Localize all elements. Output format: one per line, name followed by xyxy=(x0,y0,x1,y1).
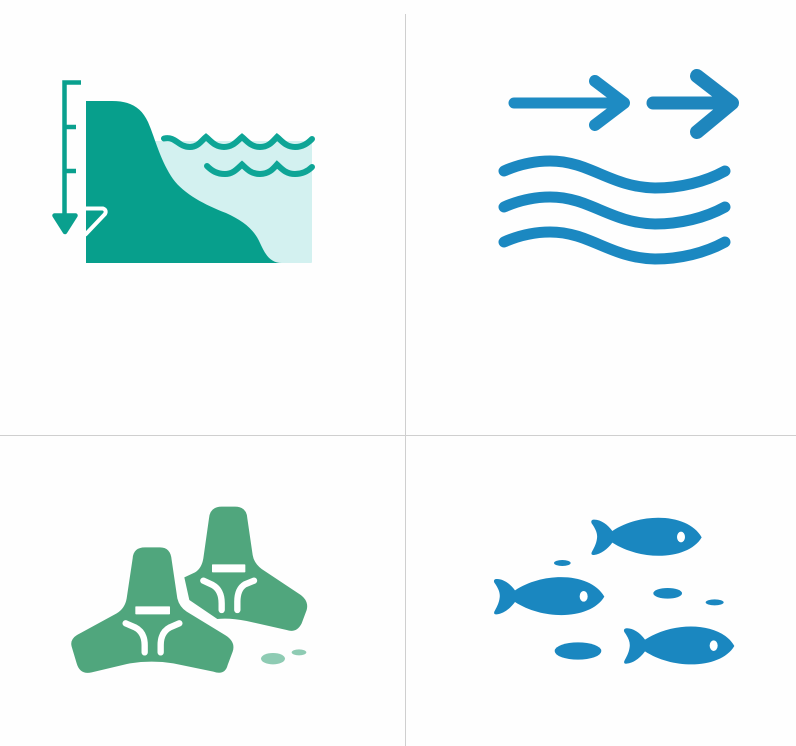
icon: school of fish xyxy=(494,518,734,664)
cliff seabed xyxy=(86,101,282,263)
front tetrapod xyxy=(71,547,233,673)
large arrow xyxy=(653,76,732,132)
pebbles xyxy=(261,649,306,664)
fish top xyxy=(591,518,702,556)
fish middle xyxy=(494,577,604,615)
bubbles xyxy=(554,560,724,660)
notch outline xyxy=(85,208,106,235)
current waves xyxy=(504,161,725,259)
icon: tetrapod breakwater blocks xyxy=(71,507,307,673)
fish bottom xyxy=(624,626,734,664)
small arrow xyxy=(514,81,624,125)
icon: current arrows and waves xyxy=(504,76,732,259)
back tetrapod xyxy=(184,507,307,631)
surface wave xyxy=(164,137,312,147)
icon: seabed depth profile xyxy=(54,82,312,263)
water body xyxy=(150,141,312,263)
depth ruler with arrow xyxy=(54,82,81,232)
lower wave xyxy=(207,164,312,174)
